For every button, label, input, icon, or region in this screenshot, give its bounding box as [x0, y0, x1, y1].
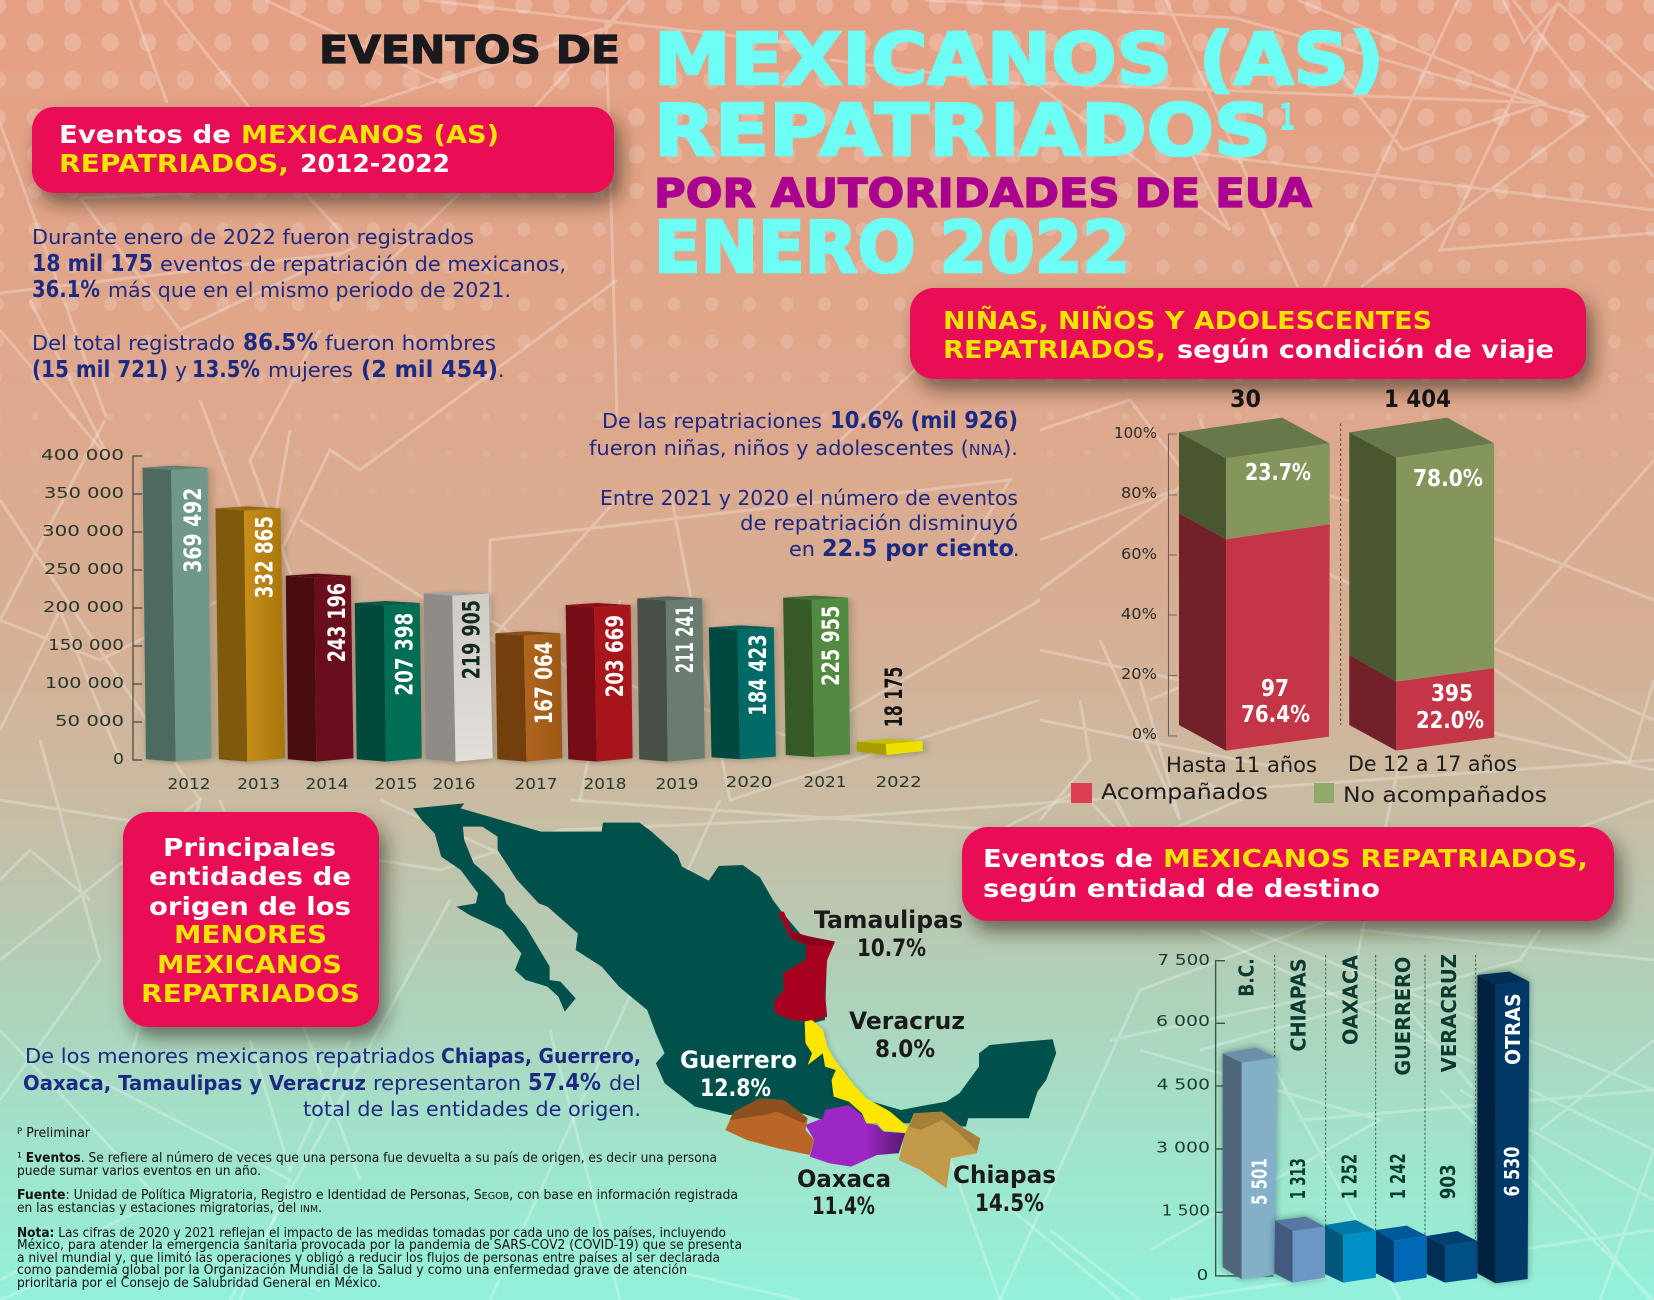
note: fuente: Fuente: Unidad de Política Migratoria, Registro e Identidad de Personas, SEGOB, con base en información registrada — [17, 1188, 738, 1203]
country shape — [413, 803, 1056, 1127]
separators — [1275, 955, 1476, 1240]
y axis labels — [1156, 952, 1210, 1284]
panel heading: principales entidades de origen: origen de los — [149, 892, 351, 921]
map labels: 8.0% — [875, 1035, 935, 1063]
text block: menores repatriados: 57.4% — [528, 1070, 601, 1096]
bar: Oaxaca — [1325, 1220, 1376, 1283]
year labels: 2021 — [804, 773, 846, 791]
y axis labels: 250 000 — [44, 560, 124, 578]
note: preliminar: P — [17, 1127, 23, 1137]
axis labels: 40% — [1121, 605, 1157, 623]
y axis labels: 50 000 — [55, 712, 124, 730]
text block: enero 2022 summary: Del total registrado — [32, 331, 235, 355]
panel heading: entidad de destino — [962, 827, 1614, 921]
map labels: 11.4% — [812, 1192, 875, 1220]
text block: enero 2022 summary: (15 mil 721) — [32, 357, 168, 383]
bar values: 219 905 — [458, 600, 486, 679]
title: enero 2022: ENERO 2022 — [654, 206, 1130, 289]
bar values: 369 492 — [179, 488, 207, 573]
y axis labels: 150 000 — [48, 636, 124, 654]
panel heading: principales entidades de origen: Principales — [163, 833, 336, 862]
bar values: 5 501 — [1248, 1158, 1272, 1205]
year labels: 2020 — [726, 773, 772, 791]
year labels: 2018 — [584, 775, 626, 793]
percent labels: 23.7% — [1245, 460, 1311, 486]
panel heading: entidad de destino: MEXICANOS REPATRIADOS, — [1163, 844, 1588, 873]
bar labels: CHIAPAS — [1287, 958, 1311, 1052]
stacked bar chart: condicion de viaje — [1071, 385, 1547, 807]
y axis labels — [41, 446, 124, 768]
text block: menores repatriados: Chiapas, Guerrero, — [441, 1044, 641, 1068]
y axis labels: 0 — [113, 750, 124, 768]
bar: Chiapas — [1274, 1217, 1325, 1283]
bar values: 903 — [1436, 1164, 1460, 1199]
text block: enero 2022 summary: mujeres — [268, 358, 353, 382]
panel heading: eventos 2012-2022: REPATRIADOS, — [59, 149, 289, 178]
axis line and ticks — [133, 456, 142, 760]
legend: No acompañados — [1343, 783, 1547, 807]
panel heading: entidad de destino: Eventos de — [983, 844, 1153, 873]
y axis labels: 100 000 — [45, 674, 124, 692]
text block: enero 2022 summary: Durante enero de 2022 fueron registrados — [32, 225, 474, 249]
bar: Baja California — [1223, 1048, 1277, 1279]
map labels: Chiapas — [953, 1161, 1056, 1189]
note: nota: Nota: Las cifras de 2020 y 2021 reflejan el impacto de las medidas tomadas por cada uno de los países, incluyendo — [17, 1226, 726, 1241]
y axis labels: 300 000 — [42, 522, 124, 540]
panel heading: ninas ninos y adolescentes: REPATRIADOS, — [943, 335, 1166, 364]
axis — [1168, 423, 1341, 736]
panel heading: eventos 2012-2022: 2012-2022 — [300, 149, 450, 178]
title: mexicanos: MEXICANOS (AS) — [654, 18, 1384, 101]
y axis labels: 1 500 — [1162, 1203, 1210, 1220]
bar values: 243 196 — [323, 583, 351, 662]
panel heading: principales entidades de origen: entidades de — [149, 862, 351, 891]
note: eventos — [17, 1151, 717, 1179]
map labels: Veracruz — [849, 1007, 965, 1035]
state: Veracruz — [805, 1020, 910, 1133]
text block: NNA and 22.5 percent: 10.6% (mil 926) — [830, 408, 1018, 434]
axis labels: 100% — [1114, 424, 1157, 442]
title: eventos de: EVENTOS DE — [319, 28, 620, 72]
bar labels: GUERRERO — [1391, 957, 1415, 1076]
bar labels: OAXACA — [1338, 955, 1362, 1045]
bar values: 203 669 — [601, 615, 629, 697]
text block: enero 2022 summary: 18 mil 175 — [32, 251, 153, 277]
year labels: 2017 — [514, 775, 558, 793]
bar values: 6 530 — [1500, 1147, 1524, 1197]
title: por autoridades de EUA: POR AUTORIDADES DE EUA — [654, 171, 1312, 217]
text block: NNA and 22.5 percent — [589, 408, 1019, 562]
text block: NNA and 22.5 percent: Entre 2021 y 2020 el número de eventos — [600, 486, 1018, 510]
year labels — [168, 773, 922, 793]
map labels — [680, 906, 1056, 1220]
text block: menores repatriados: De los menores mexicanos repatriados — [25, 1044, 435, 1068]
bar values: 225 955 — [817, 606, 845, 686]
year labels: 2022 — [876, 773, 922, 791]
3D bars — [143, 466, 923, 762]
year labels: 2012 — [168, 775, 210, 793]
note: nota: a nivel mundial y, que limitó las operaciones y obligó a reducir los flujos de personas entre países al ser declarada — [17, 1251, 720, 1266]
state: Guerrero — [725, 1098, 814, 1155]
percent labels: 78.0% — [1413, 466, 1483, 492]
category labels — [1166, 752, 1517, 777]
year labels: 2015 — [374, 775, 418, 793]
bar labels: VERACRUZ — [1437, 954, 1461, 1072]
legend — [1071, 780, 1547, 807]
state: Tamaulipas — [774, 912, 835, 1022]
bar: Guerrero — [1376, 1226, 1427, 1283]
legend: Acompañados — [1101, 780, 1268, 804]
axis labels: 20% — [1121, 665, 1157, 683]
text block: NNA and 22.5 percent: 22.5 por ciento — [822, 536, 1014, 562]
text block: enero 2022 summary: (2 mil 454) — [361, 357, 498, 383]
text block: NNA and 22.5 percent: De las repatriaciones — [602, 409, 822, 433]
text block: menores repatriados: del — [609, 1071, 641, 1095]
panel heading: ninas ninos y adolescentes — [910, 288, 1586, 379]
percent labels — [1241, 460, 1484, 734]
text block: NNA and 22.5 percent: de repatriación disminuyó — [740, 511, 1018, 535]
text block: NNA and 22.5 percent: . — [1013, 537, 1019, 561]
y axis labels: 4 500 — [1157, 1076, 1210, 1093]
category labels: Hasta 11 años — [1166, 753, 1317, 777]
map labels: Oaxaca — [797, 1165, 891, 1193]
percent labels: 76.4% — [1241, 702, 1310, 728]
panel heading: eventos 2012-2022: Eventos de — [59, 120, 231, 149]
note: nota: México, para atender la emergencia sanitaria provocada por la pandemia de SARS-COV2 (COVID-19) que se presenta — [17, 1238, 742, 1253]
text block: enero 2022 summary: y — [175, 358, 187, 382]
axis labels: 80% — [1121, 484, 1157, 502]
percent labels: 395 — [1431, 681, 1473, 707]
y axis labels: 0 — [1197, 1267, 1208, 1284]
bar: Veracruz — [1427, 1231, 1477, 1283]
year labels: 2016 — [432, 775, 476, 793]
note: eventos: puede sumar varios eventos en un año. — [17, 1164, 261, 1179]
text block: enero 2022 summary: 36.1% — [32, 277, 100, 303]
state: Oaxaca — [806, 1105, 905, 1167]
text block: enero 2022 summary — [32, 225, 566, 383]
note: nota: como pandemia global por la Organización Mundial de la Salud y como una enfermedad grave de atención — [17, 1263, 687, 1278]
footnotes — [17, 1126, 742, 1291]
bar values: 211 241 — [671, 606, 699, 673]
bar values: 1 252 — [1338, 1154, 1362, 1199]
axis labels — [1114, 424, 1157, 743]
text block: menores repatriados: representaron — [373, 1071, 521, 1095]
title — [319, 18, 1384, 289]
bar values — [179, 488, 908, 727]
axis labels: 0% — [1132, 725, 1157, 743]
panel heading: principales entidades de origen: MEXICANOS — [157, 950, 342, 979]
panel heading: principales entidades de origen: REPATRIADOS — [141, 979, 360, 1008]
text block: NNA and 22.5 percent: fueron niñas, niños y adolescentes ( NNA). — [589, 436, 1018, 460]
year labels: 2013 — [237, 775, 280, 793]
text block: enero 2022 summary: eventos de repatriación de mexicanos, — [160, 252, 566, 276]
totals second: 1 404 — [1384, 385, 1451, 413]
note: eventos: ¹ Eventos. Se refiere al número de veces que una persona fue devuelta a su país de origen, es decir una persona — [17, 1151, 717, 1166]
year labels: 2014 — [306, 775, 348, 793]
map labels: 10.7% — [857, 934, 926, 962]
bar: hasta 11 anos — [1179, 418, 1330, 751]
y axis labels: 200 000 — [43, 598, 124, 616]
y axis labels: 400 000 — [41, 446, 124, 464]
percent labels: 97 — [1261, 676, 1289, 702]
note: fuente: en las estancias y estaciones migratorias, del INM. — [17, 1201, 322, 1216]
map of Mexico — [413, 803, 1056, 1220]
text block: enero 2022 summary: 86.5% — [243, 330, 318, 356]
text block: enero 2022 summary: 13.5% — [192, 357, 260, 383]
bar: de 12 a 17 anos — [1349, 418, 1494, 751]
panel heading: eventos 2012-2022 — [32, 107, 614, 193]
y axis labels: 350 000 — [44, 484, 124, 502]
bar labels: OTRAS — [1501, 993, 1525, 1065]
text block: enero 2022 summary: fueron hombres — [325, 331, 496, 355]
bar values: 332 865 — [250, 516, 278, 598]
bar: Otras — [1477, 972, 1529, 1283]
text block: menores repatriados: Oaxaca, Tamaulipas y Veracruz — [23, 1071, 366, 1095]
panel heading: ninas ninos y adolescentes: NIÑAS, NIÑOS Y ADOLESCENTES — [943, 306, 1432, 335]
bar values: 167 064 — [530, 642, 558, 724]
bar values: 1 242 — [1386, 1153, 1410, 1199]
axis labels: 60% — [1121, 545, 1157, 563]
map labels: 12.8% — [700, 1074, 771, 1102]
map labels: 14.5% — [975, 1189, 1044, 1217]
bar labels: B.C. — [1234, 958, 1258, 997]
y axis labels: 7 500 — [1157, 952, 1210, 969]
bar values: 18 175 — [880, 667, 908, 727]
note: nota — [17, 1226, 742, 1291]
bar chart: entidad de destino — [1156, 952, 1529, 1284]
map labels: Tamaulipas — [814, 906, 963, 934]
bar chart: eventos 2012-2022 — [41, 446, 923, 793]
note: preliminar: Preliminar — [22, 1126, 91, 1141]
category labels: De 12 a 17 años — [1348, 752, 1517, 776]
panel heading: ninas ninos y adolescentes: según condición de viaje — [1177, 335, 1554, 364]
note: nota: prioritaria por el Consejo de Salubridad General en México. — [17, 1276, 381, 1291]
panel heading: eventos 2012-2022: MEXICANOS (AS) — [241, 120, 499, 149]
panel heading: principales entidades de origen: MENORES — [174, 920, 327, 949]
bar values: 1 313 — [1286, 1158, 1310, 1199]
bar values: 184 423 — [744, 634, 772, 716]
panel heading: entidad de destino: según entidad de destino — [983, 874, 1380, 903]
background dot pattern — [0, 0, 1654, 456]
text block: menores repatriados: total de las entidades de origen. — [303, 1097, 641, 1121]
year labels: 2019 — [656, 775, 698, 793]
panel heading: principales entidades de origen — [123, 812, 379, 1027]
map labels: Guerrero — [680, 1046, 797, 1074]
state: Chiapas — [899, 1112, 980, 1188]
title: repatriados: 1 — [1279, 96, 1295, 139]
y axis labels: 6 000 — [1156, 1013, 1210, 1030]
note: fuente — [17, 1188, 738, 1216]
text block: NNA and 22.5 percent: en — [789, 537, 815, 561]
text block: menores repatriados — [23, 1044, 641, 1121]
bar labels — [1234, 954, 1525, 1076]
percent labels: 22.0% — [1416, 708, 1484, 734]
axis — [1216, 961, 1273, 1276]
bar values: 207 398 — [390, 613, 418, 696]
y axis labels: 3 000 — [1156, 1139, 1210, 1156]
totals: 30 — [1230, 385, 1261, 413]
text block: enero 2022 summary: más que en el mismo periodo de 2021. — [108, 278, 511, 302]
bar values — [1248, 1147, 1524, 1205]
text block: enero 2022 summary: . — [498, 358, 504, 382]
title: repatriados: REPATRIADOS — [654, 89, 1271, 172]
